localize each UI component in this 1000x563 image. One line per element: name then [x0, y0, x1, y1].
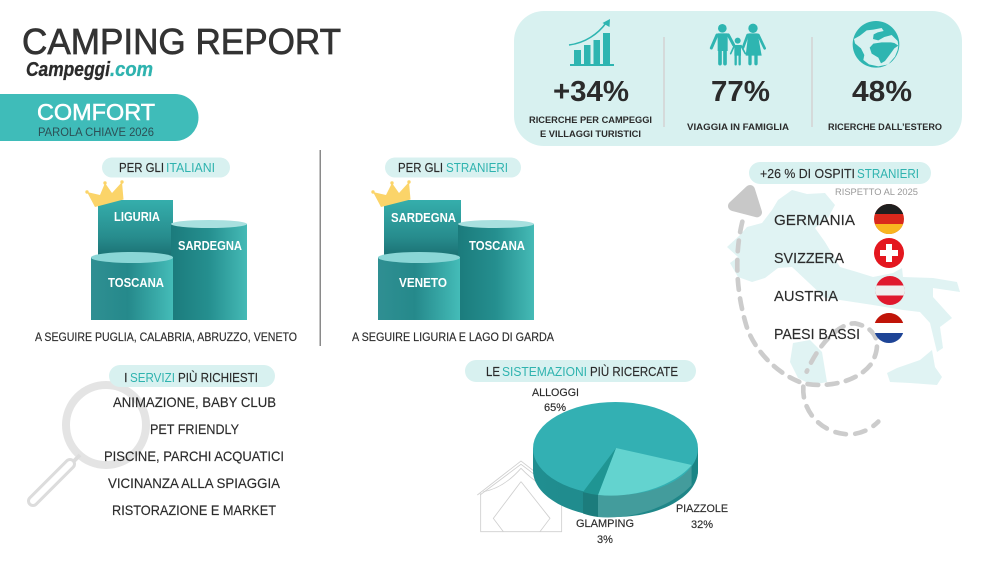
keyword banner: comfort	[0, 94, 198, 141]
heading: per gli italiani: PER GLI	[119, 160, 164, 175]
list: countries: AUSTRIA	[774, 288, 838, 305]
panel: key stats	[514, 11, 962, 146]
icon: flag austria	[876, 276, 904, 305]
podium: stranieri: SARDEGNA	[391, 210, 457, 225]
label: glamping: 3%	[597, 534, 613, 546]
podium: italiani: TOSCANA	[108, 275, 165, 290]
podium: italiani: LIGURIA	[114, 209, 161, 224]
caption: a seguire stranieri: A SEGUIRE LIGURIA E LAGO DI GARDA	[352, 332, 554, 344]
icon: flag switzerland	[874, 238, 904, 268]
icon: glamping tent	[477, 461, 565, 532]
label: glamping	[576, 518, 634, 546]
logo: Campeggi.com: Campeggi	[26, 59, 110, 81]
list: servizi: RISTORAZIONE E MARKET	[112, 502, 276, 518]
heading: sistemazioni: LE	[486, 364, 500, 379]
icon: crown	[85, 180, 124, 207]
podium: italiani	[85, 180, 247, 320]
label: ricerche per campeggi: RICERCHE PER CAMPEGGI	[529, 115, 652, 126]
list: countries: GERMANIA	[774, 212, 855, 229]
list: servizi: VICINANZA ALLA SPIAGGIA	[108, 475, 281, 491]
caption: a seguire italiani: A SEGUIRE PUGLIA, CALABRIA, ABRUZZO, VENETO	[35, 332, 297, 344]
heading: per gli italiani	[102, 158, 230, 178]
list: servizi: ANIMAZIONE, BABY CLUB	[113, 394, 276, 410]
label: alloggi	[532, 387, 579, 414]
label: viaggia in famiglia: VIAGGIA IN FAMIGLIA	[687, 122, 789, 133]
heading: per gli stranieri: STRANIERI	[446, 160, 508, 175]
heading: ospiti stranieri: +26 % DI OSPITI	[760, 166, 855, 181]
heading: servizi	[109, 365, 275, 387]
heading: ospiti stranieri: STRANIERI	[857, 166, 919, 181]
list: servizi	[104, 394, 284, 518]
map: italy	[727, 190, 960, 385]
arrow: dashed route	[733, 190, 878, 434]
icon: flag netherlands	[874, 313, 904, 343]
list: servizi: PISCINE, PARCHI ACQUATICI	[104, 448, 284, 464]
icon: crown	[371, 180, 411, 207]
heading: per gli stranieri	[385, 158, 521, 178]
list: countries: SVIZZERA	[774, 250, 844, 267]
chart: pie	[533, 402, 698, 517]
label: piazzole: 32%	[691, 519, 713, 531]
icon: globe	[853, 21, 899, 68]
list: countries: PAESI BASSI	[774, 326, 860, 343]
label: ricerche dall'estero: RICERCHE DALL’ESTERO	[828, 122, 942, 133]
logo: Campeggi.com: .com	[110, 59, 153, 81]
stat: 77%: 77%	[711, 76, 770, 108]
label: alloggi: ALLOGGI	[532, 387, 579, 399]
stat: 48%: 48%	[852, 76, 912, 108]
icon: growth chart	[569, 19, 614, 66]
icon: family	[711, 24, 765, 64]
heading: sistemazioni: PIÙ RICERCATE	[590, 364, 678, 379]
heading: ospiti stranieri	[749, 162, 931, 184]
heading: per gli italiani: ITALIANI	[166, 160, 215, 175]
heading: sistemazioni: SISTEMAZIONI	[502, 364, 587, 379]
heading: sistemazioni	[465, 360, 696, 382]
icon: magnifier	[33, 385, 146, 501]
stat: +34%: +34%	[553, 76, 629, 108]
podium: italiani: SARDEGNA	[178, 238, 243, 253]
podium: stranieri	[371, 180, 534, 320]
icon: flag germany	[874, 204, 904, 234]
note: rispetto al 2025: RISPETTO AL 2025	[835, 187, 918, 198]
heading: servizi: I	[124, 370, 128, 385]
label: ricerche per campeggi	[529, 115, 652, 140]
keyword banner: comfort: COMFORT	[37, 99, 155, 125]
label: piazzole	[676, 503, 728, 531]
podium: stranieri: VENETO	[399, 275, 447, 290]
list: countries	[774, 212, 860, 343]
heading: servizi: PIÙ RICHIESTI	[178, 370, 258, 385]
list: servizi: PET FRIENDLY	[150, 421, 240, 437]
label: glamping: GLAMPING	[576, 518, 634, 530]
podium: stranieri: TOSCANA	[469, 238, 526, 253]
label: ricerche per campeggi: E VILLAGGI TURISTICI	[540, 129, 641, 140]
label: alloggi: 65%	[544, 402, 566, 414]
label: piazzole: PIAZZOLE	[676, 503, 728, 515]
heading: servizi: SERVIZI	[130, 370, 175, 385]
heading: per gli stranieri: PER GLI	[398, 160, 443, 175]
keyword banner: comfort: PAROLA CHIAVE 2026	[38, 127, 154, 139]
title: CAMPING REPORT	[22, 21, 341, 62]
